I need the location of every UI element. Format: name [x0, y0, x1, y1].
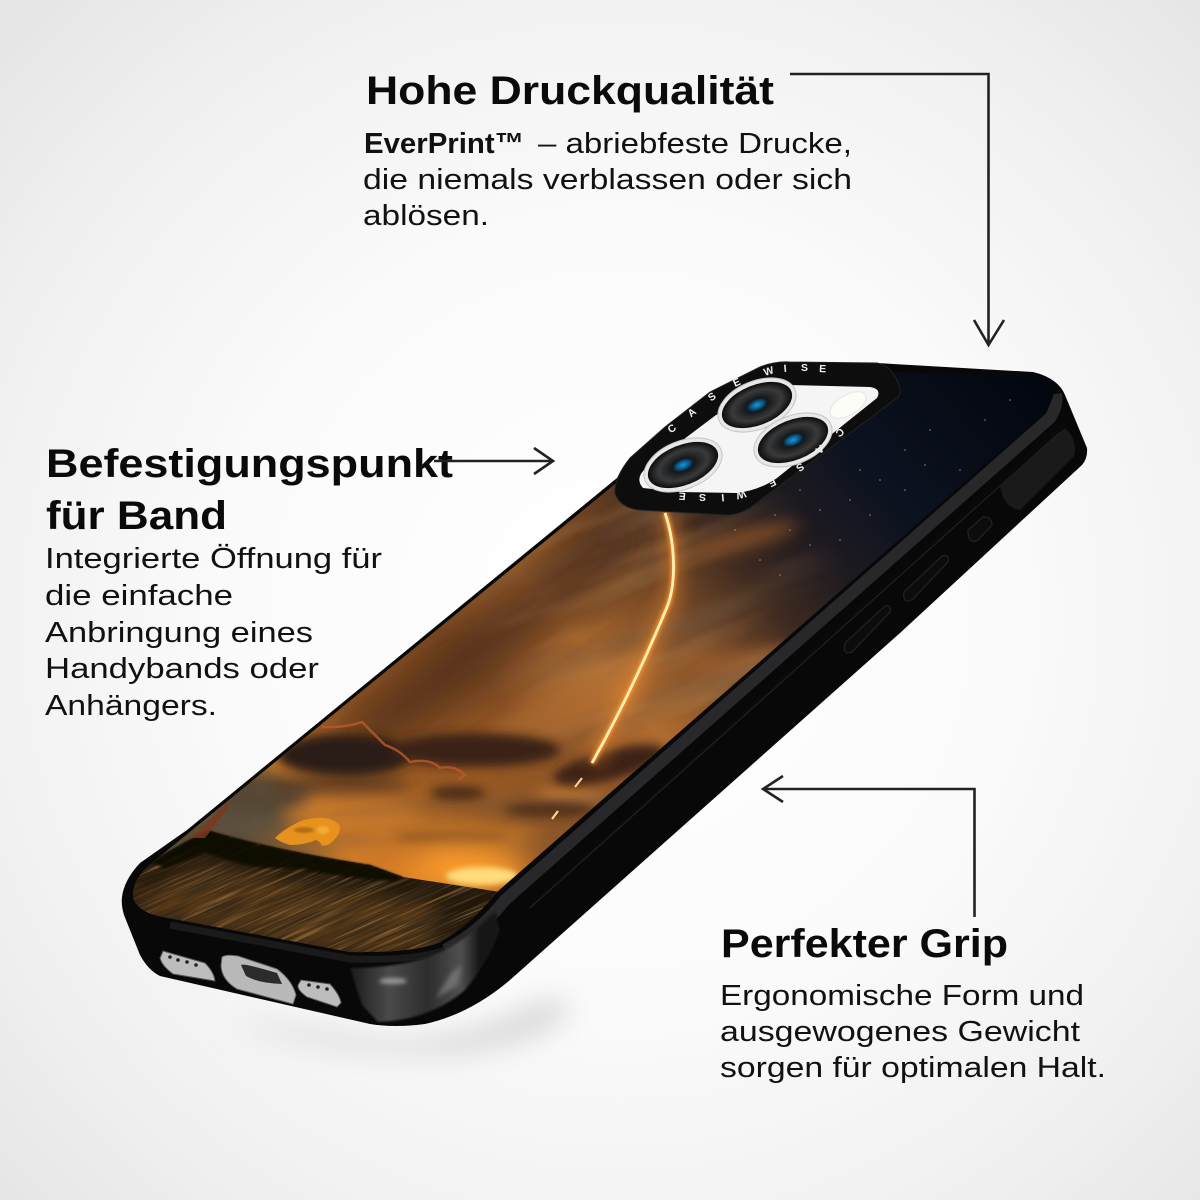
description: ablösen. [363, 200, 489, 232]
upper sky streaks [508, 504, 816, 742]
callout: grip [720, 922, 1106, 1084]
heading: Hohe Druckqualität [366, 69, 774, 113]
corner highlight [350, 912, 500, 1022]
warm cloud bands [190, 773, 605, 849]
description: Handybands oder [45, 653, 319, 685]
heading: für Band [46, 494, 227, 538]
callout: strap attachment [45, 442, 453, 722]
case body [122, 362, 1087, 1026]
moon [275, 818, 340, 846]
flash [826, 386, 870, 424]
arrow: print quality [790, 74, 1004, 345]
stars [734, 399, 1011, 576]
description: Anbringung eines [45, 617, 313, 649]
description [45, 543, 382, 722]
camera tray [639, 385, 878, 493]
description: sorgen für optimalen Halt. [720, 1052, 1106, 1084]
lens: right [746, 402, 840, 478]
charging port [221, 955, 296, 1004]
side button: volume up [904, 556, 948, 601]
heading: Befestigungspunkt [46, 442, 453, 486]
side groove [470, 420, 1068, 958]
horizon sun [446, 867, 518, 885]
brand ring bottom: CASEWISE [678, 425, 846, 503]
grass texture [133, 837, 492, 952]
storm clouds [277, 733, 670, 844]
heading [46, 442, 453, 538]
description: Integrierte Öffnung für [45, 543, 382, 575]
horizon glow [335, 846, 530, 890]
phone shadow [230, 1000, 570, 1055]
bump frame [615, 362, 900, 515]
description: die niemals verblassen oder sich [363, 164, 852, 196]
description: Anhängers. [45, 690, 217, 722]
rocket trail [552, 513, 674, 819]
side button: small [968, 517, 992, 541]
description: ausgewogenes Gewicht [720, 1016, 1080, 1048]
brand ring top: CASEWISE [665, 362, 826, 436]
tree line [150, 830, 403, 881]
callout: print quality [363, 69, 852, 232]
description: – abriebfeste Drucke, [538, 128, 852, 160]
upper clouds [494, 512, 802, 738]
left speaker [160, 951, 215, 981]
corner gloss [379, 965, 462, 998]
foliage [190, 800, 230, 838]
phone case illustration [122, 361, 1088, 1026]
description: EverPrint™ [364, 128, 524, 160]
ground [133, 831, 498, 952]
lens: bottom [636, 427, 730, 503]
description [720, 980, 1106, 1084]
description: die einfache [45, 580, 233, 612]
left edge darkening [300, 470, 650, 760]
camera bump [615, 362, 900, 515]
sky gradient [133, 372, 1054, 952]
lower cloud streaks [301, 790, 610, 852]
description [363, 128, 852, 232]
cloud rim light [322, 722, 465, 780]
strap slot [1000, 428, 1075, 510]
bumper lip right [445, 394, 1056, 950]
bumper lip bottom [170, 925, 445, 959]
artwork on back [133, 372, 1054, 952]
lens: top [710, 367, 804, 443]
arrow: strap attachment [434, 448, 553, 474]
side button: volume down [844, 606, 890, 653]
description: Ergonomische Form und [720, 980, 1084, 1012]
right speaker [298, 980, 341, 1007]
arrow: grip [763, 776, 974, 917]
heading: Perfekter Grip [721, 922, 1008, 966]
